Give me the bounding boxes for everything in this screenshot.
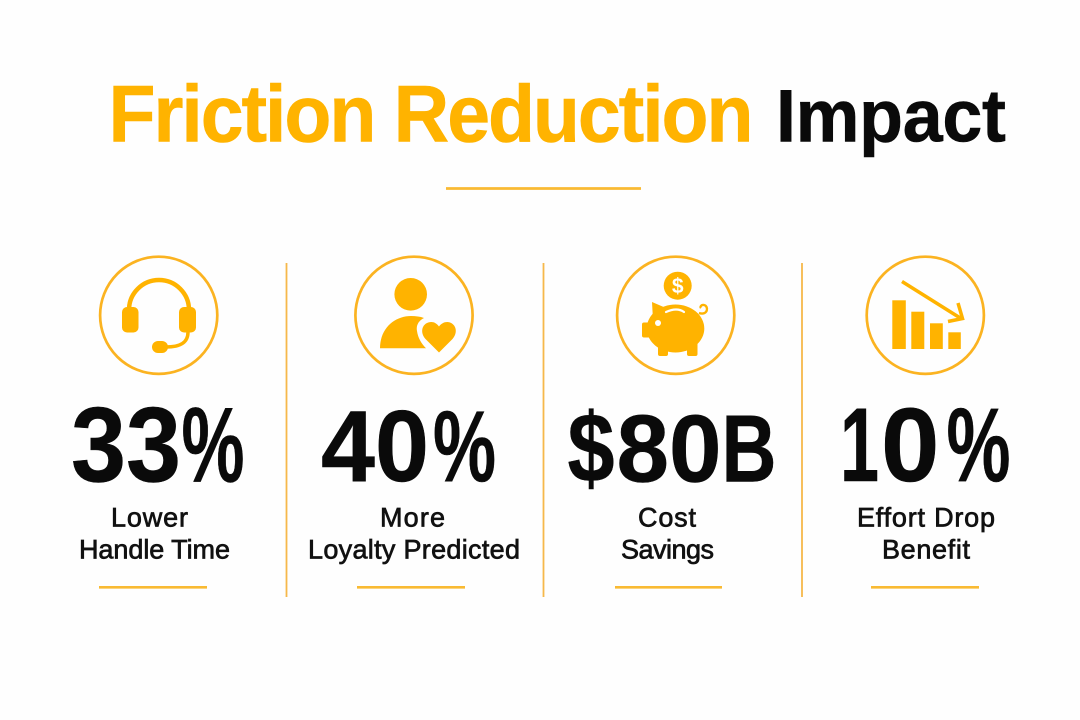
title: Impact [776, 76, 1006, 158]
label: lower handle time: Handle Time [79, 534, 230, 564]
label: cost savings [621, 502, 714, 564]
statistic: $80B: 80 [616, 396, 722, 502]
panel: cost savings [568, 257, 776, 587]
label: lower handle time: Lower [111, 502, 188, 532]
panel: effort drop benefit [840, 257, 1010, 587]
statistic: $80B: $ [568, 392, 614, 502]
statistic: $80B [568, 392, 776, 502]
statistic: 10%: 1 [840, 387, 879, 504]
statistic: 10%: % [946, 387, 1010, 504]
label: effort drop benefit: Effort Drop [857, 502, 995, 532]
label: more loyalty predicted [308, 502, 520, 564]
statistic: 40%: % [433, 391, 496, 503]
statistic: 10% [840, 387, 1010, 504]
icon: headset [100, 257, 217, 374]
statistic: 40%: 40 [321, 391, 429, 503]
label: effort drop benefit [857, 502, 995, 564]
icon: person with heart [355, 257, 473, 374]
icon: falling bar chart with arrow [867, 257, 984, 374]
statistic: 33%: 33 [71, 384, 181, 504]
statistic: 33%: % [182, 384, 244, 504]
title: Friction Reduction [108, 68, 754, 159]
label: cost savings: Cost [638, 502, 696, 532]
statistic: 10%: 0 [881, 387, 939, 504]
label: more loyalty predicted: Loyalty Predicted [308, 534, 520, 564]
icon: piggy bank with coin [617, 257, 734, 374]
label: cost savings: Savings [621, 534, 714, 564]
statistic: $80B: B [722, 396, 776, 502]
icon: piggy bank with coin: $ [672, 275, 684, 298]
statistic: 40% [321, 391, 496, 503]
label: lower handle time [79, 502, 230, 564]
label: more loyalty predicted: More [380, 502, 445, 532]
label: effort drop benefit: Benefit [882, 534, 970, 564]
panel: lower handle time [71, 257, 244, 587]
panel: more loyalty predicted [308, 257, 520, 587]
statistic: 33% [71, 384, 244, 504]
